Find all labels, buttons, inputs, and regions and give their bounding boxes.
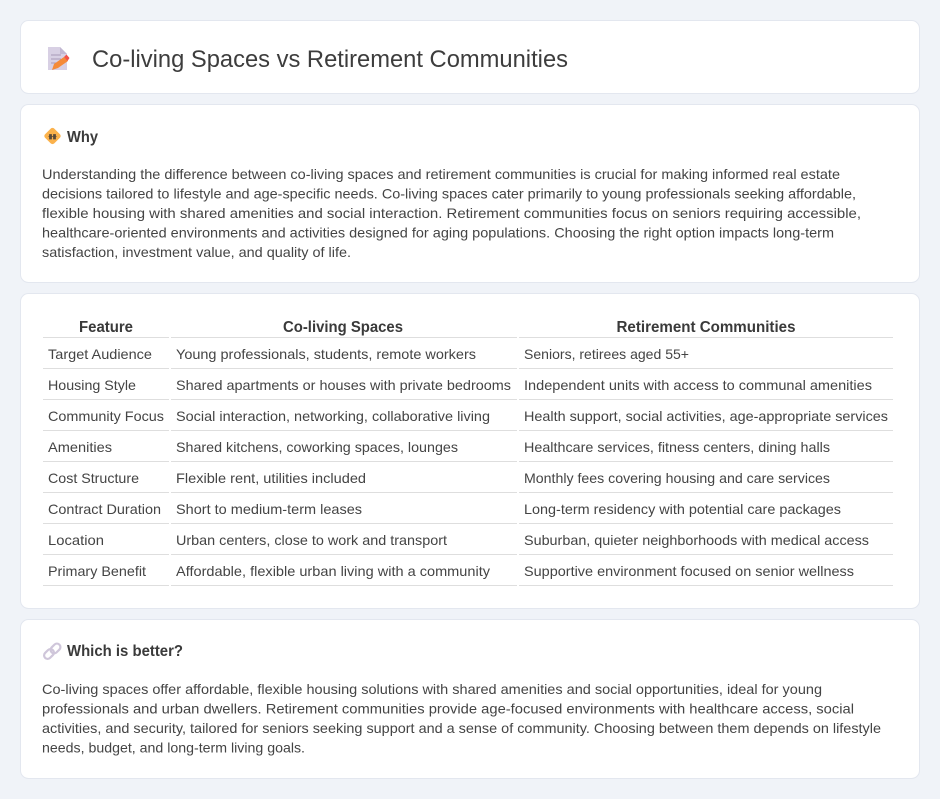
panel: which is better — [20, 620, 920, 778]
panel: comparison table — [20, 294, 920, 608]
row: community focus: Social interaction, networking, collaborative living — [176, 408, 490, 424]
row: amenities: Shared kitchens, coworking spaces, lounges — [176, 439, 458, 455]
text block: why paragraph — [42, 166, 861, 260]
row: location: Location — [48, 532, 104, 548]
row: cost structure: Flexible rent, utilities included — [176, 470, 366, 486]
panel: header — [20, 20, 920, 94]
row: housing style — [48, 377, 872, 393]
heading: why: Why — [67, 129, 98, 146]
row: contract duration: Short to medium-term leases — [176, 501, 362, 517]
row: housing style: Housing Style — [48, 377, 136, 393]
icon: link — [43, 642, 62, 660]
table header: Co-living Spaces — [283, 319, 403, 336]
row: amenities: Healthcare services, fitness centers, dining halls — [524, 439, 830, 455]
row: community focus: Health support, social activities, age-appropriate services — [524, 408, 888, 424]
heading: which is better: Which is better? — [67, 643, 183, 660]
row: target audience: Target Audience — [48, 346, 152, 362]
text block: which is better paragraph: Co-living spaces offer affordable, flexible housing solutions with shared amenities and social opportunities, ideal for young — [42, 681, 822, 697]
row: primary benefit: Affordable, flexible urban living with a community — [176, 563, 490, 579]
icon: document with pencil — [48, 47, 70, 70]
table header: Feature — [79, 319, 133, 336]
row: location: Suburban, quieter neighborhoods with medical access — [524, 532, 869, 548]
row: target audience — [48, 346, 689, 362]
row: contract duration: Long-term residency with potential care packages — [524, 501, 841, 517]
row: cost structure: Monthly fees covering housing and care services — [524, 470, 830, 486]
table header — [79, 319, 796, 336]
row: target audience: Young professionals, students, remote workers — [176, 346, 476, 362]
panel: why — [20, 104, 920, 282]
text block: which is better paragraph: activities, and security, tailored for seniors seeking support and a sense of community. Choosing between them depends on lifestyle — [42, 720, 881, 736]
row: amenities: Amenities — [48, 439, 112, 455]
text block: why paragraph: healthcare-oriented environments and activities designed for aging populations. Choosing the right option impacts long-term — [42, 224, 834, 240]
row: contract duration — [48, 501, 841, 517]
row: amenities — [48, 439, 830, 455]
row: primary benefit: Supportive environment focused on senior wellness — [524, 563, 854, 579]
text block: which is better paragraph — [42, 681, 881, 756]
row: housing style: Shared apartments or houses with private bedrooms — [176, 377, 511, 393]
row: housing style: Independent units with access to communal amenities — [524, 377, 872, 393]
row: contract duration: Contract Duration — [48, 501, 161, 517]
text block: which is better paragraph: needs, budget, and long-term living goals. — [42, 740, 305, 756]
row: cost structure: Cost Structure — [48, 470, 139, 486]
text block: why paragraph: decisions tailored to lifestyle and age-specific needs. Co-living spaces cater primarily to young professionals seeking affordable, — [42, 186, 856, 202]
row: location: Urban centers, close to work and transport — [176, 532, 447, 548]
row: primary benefit — [48, 563, 854, 579]
table header: Retirement Communities — [616, 319, 796, 336]
title: Co-living Spaces vs Retirement Communities — [92, 46, 568, 73]
row: community focus: Community Focus — [48, 408, 164, 424]
icon: warning diamond — [43, 127, 62, 145]
row: community focus — [48, 408, 888, 424]
row: location — [48, 532, 869, 548]
text block: why paragraph: Understanding the difference between co-living spaces and retirement communities is crucial for making informed real estate — [42, 166, 840, 182]
text block: why paragraph: satisfaction, investment value, and quality of life. — [42, 244, 351, 260]
row: target audience: Seniors, retirees aged 55+ — [524, 346, 689, 362]
row: cost structure — [48, 470, 830, 486]
text block: why paragraph: flexible housing with shared amenities and social interaction. Retirement communities focus on seniors requiring accessible, — [42, 205, 861, 221]
text block: which is better paragraph: professionals and urban dwellers. Retirement communities provide age-focused environments with healthcare access, social — [42, 700, 854, 716]
row: primary benefit: Primary Benefit — [48, 563, 146, 579]
